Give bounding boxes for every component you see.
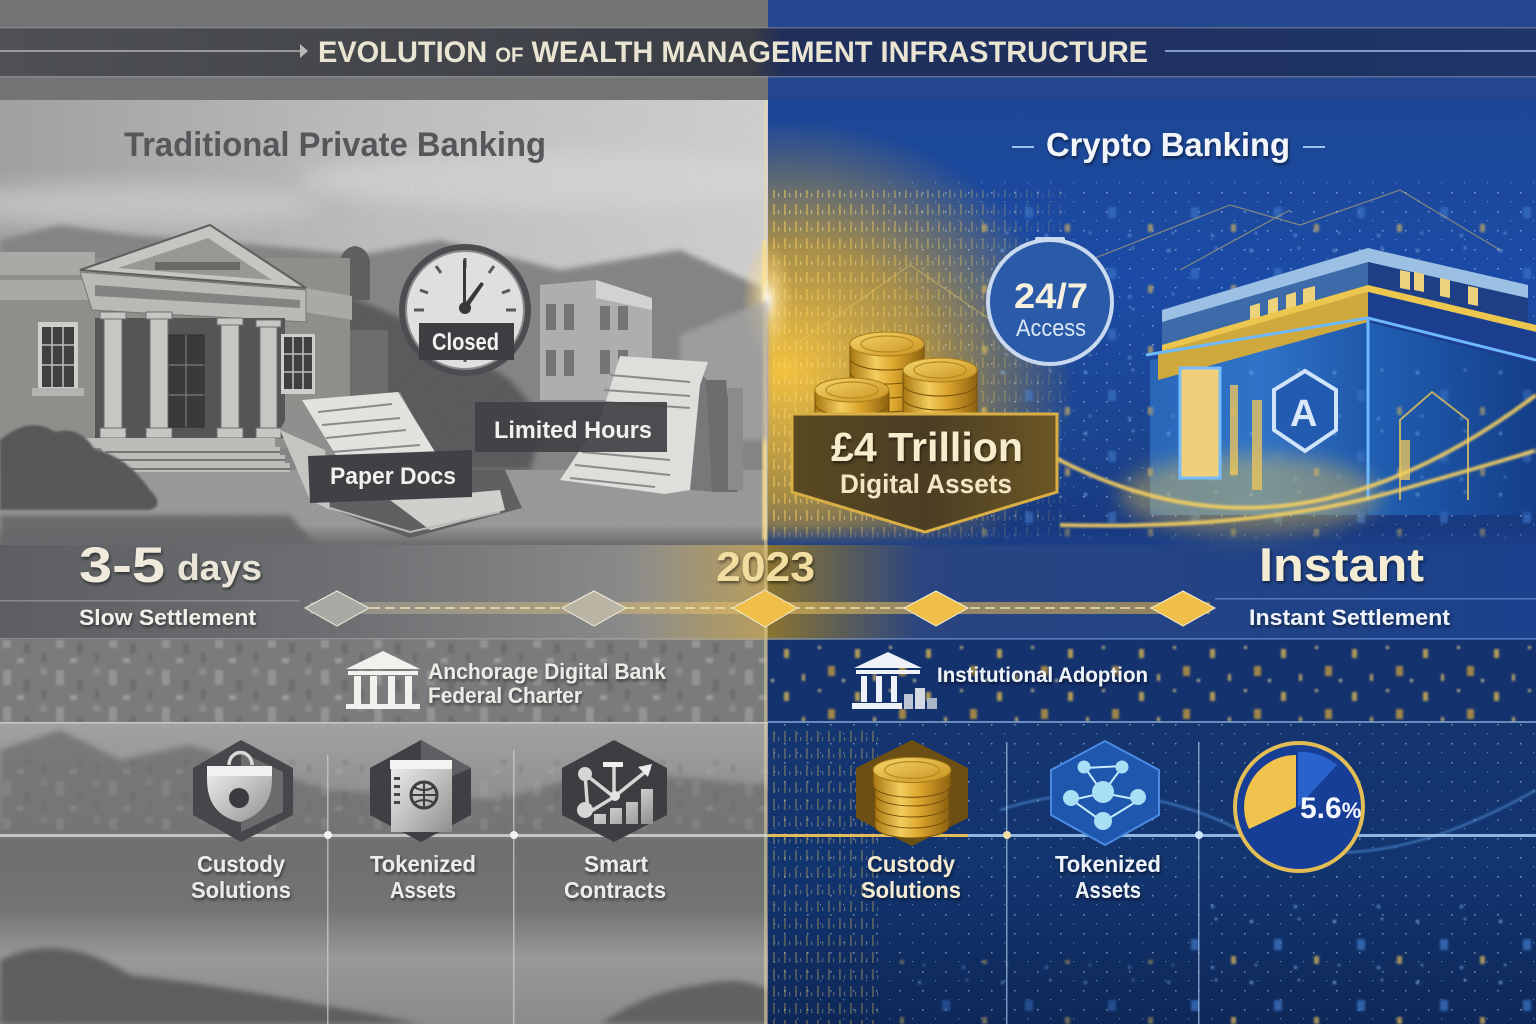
pediment	[80, 225, 306, 288]
icon: custody solutions grey	[193, 740, 293, 842]
labels: crypto services: Assets	[1075, 877, 1141, 903]
label: limited hours: Limited Hours	[494, 417, 652, 444]
coin stacks	[815, 332, 977, 428]
icon: institutional adoption	[852, 652, 937, 709]
door	[1180, 368, 1220, 478]
labels: grey services: Custody	[197, 851, 285, 877]
shrubs	[0, 425, 158, 510]
left window	[32, 322, 84, 396]
labels: crypto services	[861, 851, 1161, 903]
illustration: right document stack	[560, 356, 743, 494]
label: paper docs	[308, 450, 472, 503]
icon: federal bank	[346, 651, 420, 709]
stat: instant settlement	[1249, 538, 1451, 630]
icon: tokenized assets grey	[370, 740, 471, 842]
label: closed: Closed	[432, 329, 499, 356]
label: limited hours	[475, 402, 667, 452]
stat: 3-5 days slow settlement	[79, 537, 262, 630]
labels: crypto services: Custody	[867, 851, 955, 877]
icon: custody solutions gold	[856, 740, 968, 846]
illustration: classical bank building	[0, 225, 352, 510]
heading: crypto banking: Crypto Banking	[1046, 126, 1290, 163]
chart: 5.6% pie: 5.6%	[1300, 792, 1361, 825]
badge: 24/7 access: 24/7	[1014, 277, 1088, 316]
labels: grey services	[191, 851, 666, 903]
stat: 3-5 days slow settlement: Slow Settlement	[79, 605, 257, 630]
stat: instant settlement: Instant	[1259, 538, 1424, 591]
callout: 4 trillion digital assets	[792, 414, 1057, 532]
labels: crypto services: Tokenized	[1055, 851, 1161, 877]
door	[169, 335, 204, 427]
label: paper docs: Paper Docs	[330, 463, 456, 490]
text: anchorage digital bank federal charter	[428, 659, 667, 708]
center divider	[620, 100, 794, 1024]
glowing gold wave	[1050, 395, 1536, 526]
decorative circuit lines	[795, 190, 1500, 500]
text: anchorage digital bank federal charter: Anchorage Digital Bank	[428, 659, 667, 684]
heading: traditional private banking: Traditional Private Banking	[124, 126, 546, 164]
stat: instant settlement: Instant Settlement	[1249, 605, 1451, 630]
text: anchorage digital bank federal charter: Federal Charter	[428, 683, 582, 708]
icon: smart contracts grey	[562, 740, 667, 842]
logo hexagon	[1274, 371, 1336, 451]
badge: 24/7 access	[988, 237, 1112, 364]
grid lines lower section	[0, 721, 1536, 1024]
roof and top floor	[1162, 250, 1368, 345]
title bar	[0, 27, 1536, 78]
right background: crypto side	[768, 0, 1536, 1024]
illustration: crypto bank building	[1120, 248, 1536, 535]
stat: 3-5 days slow settlement: days	[177, 547, 262, 588]
labels: grey services: Smart	[584, 851, 648, 877]
right window	[281, 334, 315, 394]
labels: grey services: Assets	[390, 877, 456, 903]
labels: grey services: Tokenized	[370, 851, 476, 877]
icon: clock	[399, 244, 531, 376]
labels: grey services: Contracts	[564, 877, 666, 903]
callout: 4 trillion digital assets: £4 Trillion	[831, 424, 1023, 470]
icon: tokenized assets network	[1051, 741, 1159, 845]
timeline	[0, 590, 1536, 640]
labels: crypto services: Solutions	[861, 877, 961, 903]
chart: 5.6% pie	[1235, 743, 1363, 871]
text: institutional adoption: Institutional Adoption	[937, 664, 1148, 687]
columns	[100, 312, 281, 438]
illustration: left paper docs	[280, 392, 522, 538]
building walls	[1150, 322, 1368, 515]
year label: 2023: 2023	[716, 543, 815, 590]
stat: 3-5 days slow settlement: 3-5	[79, 537, 165, 593]
title text: EVOLUTION OF WEALTH MANAGEMENT INFRASTRUCTURE	[318, 36, 1148, 69]
labels: grey services: Solutions	[191, 877, 291, 903]
steps	[75, 438, 290, 472]
badge: 24/7 access: Access	[1016, 315, 1086, 342]
illustration: background city buildings	[340, 246, 768, 440]
callout: 4 trillion digital assets: Digital Assets	[840, 469, 1012, 499]
left background: traditional side	[0, 0, 820, 1024]
timeline milestones	[305, 590, 1215, 627]
logo hexagon: A	[1290, 393, 1317, 435]
